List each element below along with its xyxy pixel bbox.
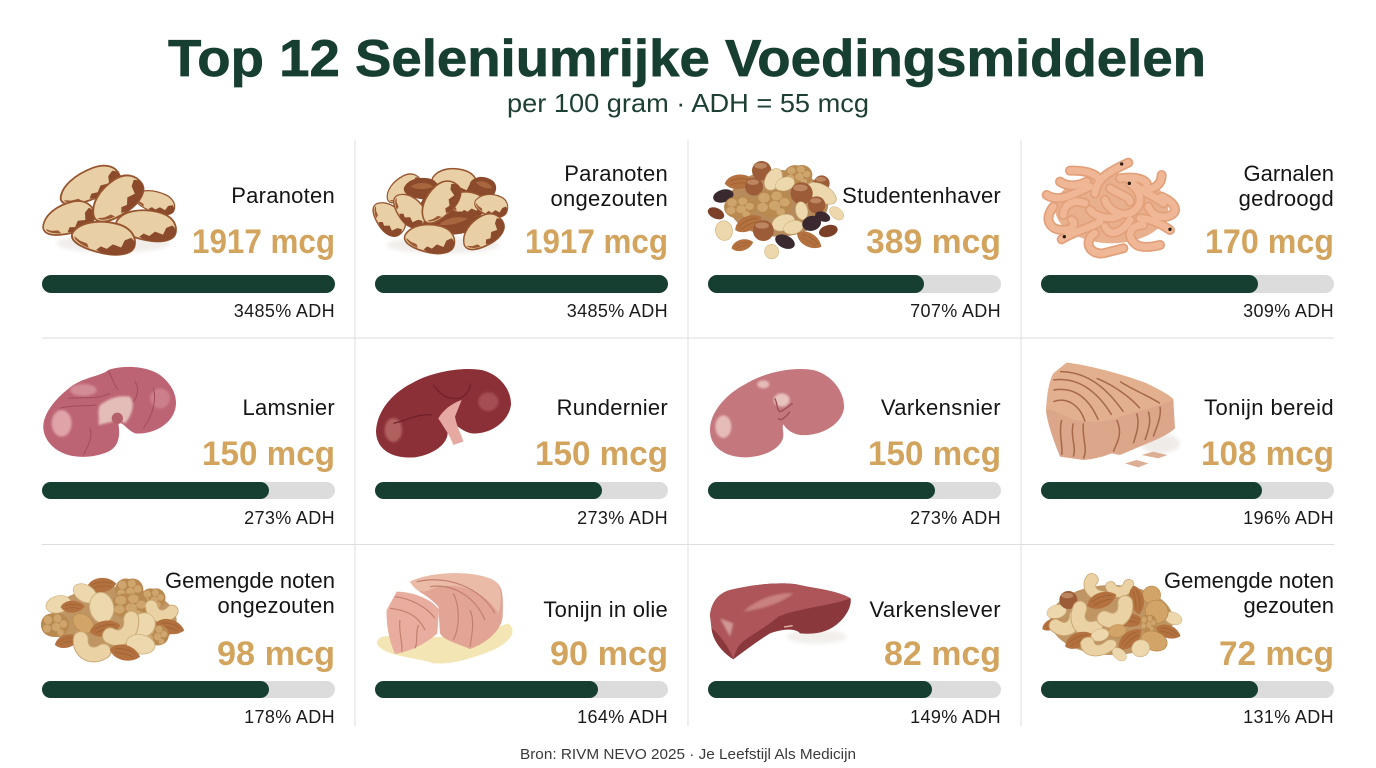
name: ongezouten bbox=[218, 593, 335, 618]
progress bar bbox=[42, 681, 335, 698]
name: Gemengde noten bbox=[1164, 568, 1334, 593]
panel: Studentenhaver bbox=[706, 161, 1001, 321]
panel: Gemengde noten ongezouten bbox=[41, 568, 335, 727]
panel: Gemengde noten gezouten bbox=[1040, 568, 1334, 727]
panel: Paranoten ongezouten bbox=[368, 161, 668, 321]
panel: Tonijn bereid bbox=[1041, 363, 1334, 528]
progress bar bbox=[375, 681, 668, 698]
percent of ADH: 164% ADH bbox=[577, 707, 668, 727]
progress bar bbox=[375, 275, 668, 293]
name: Lamsnier bbox=[243, 395, 335, 420]
value: 170 mcg bbox=[1205, 223, 1334, 261]
icon: gedroogde garnalen bbox=[1047, 162, 1175, 253]
percent of ADH: 707% ADH bbox=[910, 301, 1001, 321]
progress bar bbox=[1041, 275, 1334, 293]
value: 150 mcg bbox=[868, 435, 1001, 473]
icon: rundernier bbox=[376, 369, 511, 458]
value: 98 mcg bbox=[217, 635, 335, 673]
name: Varkenslever bbox=[869, 597, 1001, 622]
panel: Garnalen gedroogd bbox=[1041, 161, 1334, 321]
name: ongezouten bbox=[550, 186, 668, 211]
value: 82 mcg bbox=[884, 635, 1001, 673]
value: 389 mcg bbox=[866, 223, 1001, 261]
icon: lamsnier bbox=[43, 367, 176, 457]
name: Tonijn bereid bbox=[1204, 395, 1334, 420]
percent of ADH: 273% ADH bbox=[910, 508, 1001, 528]
percent of ADH: 3485% ADH bbox=[234, 301, 335, 321]
icon: varkensnier bbox=[710, 369, 844, 457]
panel: Paranoten bbox=[39, 160, 335, 321]
name: Garnalen bbox=[1243, 161, 1334, 186]
icon: paranoten ongezouten bbox=[368, 163, 511, 257]
percent of ADH: 273% ADH bbox=[577, 508, 668, 528]
progress bar bbox=[42, 482, 335, 499]
value: 1917 mcg bbox=[192, 223, 335, 261]
value: 150 mcg bbox=[202, 435, 335, 473]
progress bar bbox=[1041, 482, 1334, 499]
percent of ADH: 196% ADH bbox=[1243, 508, 1334, 528]
value: 1917 mcg bbox=[525, 223, 668, 261]
value: 150 mcg bbox=[535, 435, 668, 473]
title: Top 12 Seleniumrijke Voedingsmiddelen bbox=[168, 30, 1206, 88]
value: 90 mcg bbox=[550, 635, 668, 673]
icon: gemengde noten gezouten bbox=[1040, 577, 1184, 664]
progress bar bbox=[708, 275, 1001, 293]
percent of ADH: 309% ADH bbox=[1243, 301, 1334, 321]
name: gezouten bbox=[1243, 593, 1334, 618]
name: gedroogd bbox=[1239, 186, 1334, 211]
percent of ADH: 131% ADH bbox=[1243, 707, 1334, 727]
panel: Rundernier bbox=[375, 369, 668, 528]
name: Varkensnier bbox=[881, 395, 1001, 420]
icon: studentenhaver bbox=[706, 161, 846, 261]
name: Paranoten bbox=[564, 161, 668, 186]
icon: tonijn in olie bbox=[377, 573, 513, 664]
progress bar bbox=[1041, 681, 1334, 698]
percent of ADH: 178% ADH bbox=[244, 707, 335, 727]
panel: Varkensnier bbox=[708, 369, 1001, 528]
value: 108 mcg bbox=[1201, 435, 1334, 473]
panel: Lamsnier bbox=[42, 367, 335, 528]
icon: gemengde noten ongezouten bbox=[41, 577, 186, 664]
progress bar bbox=[375, 482, 668, 499]
panel: Tonijn in olie bbox=[375, 573, 668, 727]
name: Rundernier bbox=[557, 395, 668, 420]
value: 72 mcg bbox=[1219, 635, 1334, 673]
progress bar bbox=[708, 482, 1001, 499]
icon: tonijn bereid bbox=[1046, 363, 1180, 467]
name: Paranoten bbox=[231, 183, 335, 208]
name: Studentenhaver bbox=[842, 183, 1001, 208]
icon: varkenslever bbox=[710, 583, 851, 659]
subtitle: per 100 gram · ADH = 55 mcg bbox=[507, 88, 869, 118]
source footer: Bron: RIVM NEVO 2025 · Je Leefstijl Als Medicijn bbox=[520, 746, 856, 763]
panel: Varkenslever bbox=[708, 583, 1001, 727]
percent of ADH: 149% ADH bbox=[910, 707, 1001, 727]
progress bar bbox=[42, 275, 335, 293]
icon: paranoten bbox=[39, 160, 179, 259]
percent of ADH: 3485% ADH bbox=[567, 301, 668, 321]
progress bar bbox=[708, 681, 1001, 698]
name: Gemengde noten bbox=[165, 568, 335, 593]
percent of ADH: 273% ADH bbox=[244, 508, 335, 528]
name: Tonijn in olie bbox=[543, 597, 668, 622]
